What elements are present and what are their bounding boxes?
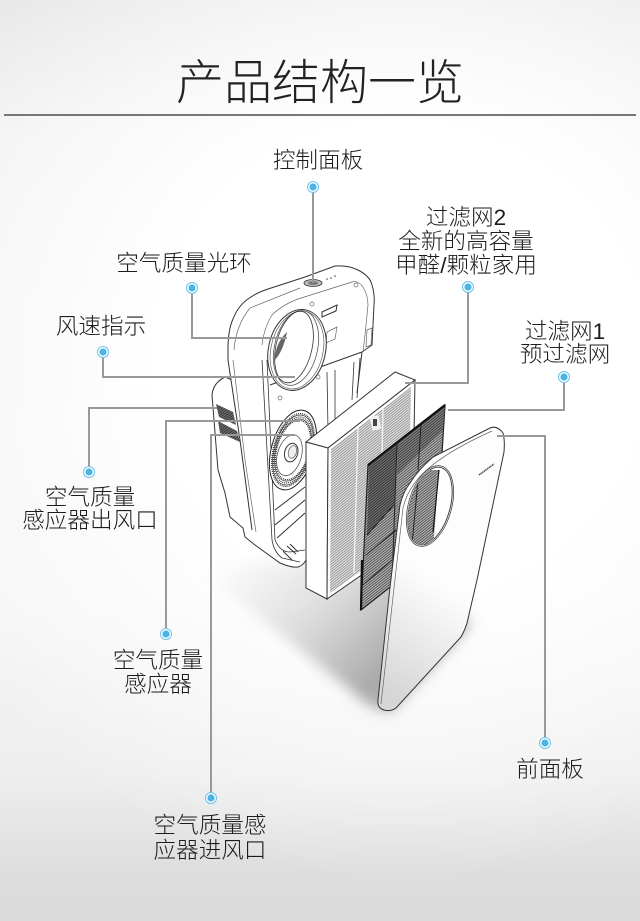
label: filter 2: 甲醛/颗粒家用 <box>395 253 537 278</box>
label: filter 1 <box>520 319 610 367</box>
label: filter 1: 过滤网1 <box>525 319 605 344</box>
connector: sensor outlet <box>84 408 217 478</box>
air quality light ring <box>260 304 334 396</box>
connector: control panel <box>308 182 318 283</box>
label: sensor: 空气质量 <box>113 648 203 673</box>
label: sensor outlet: 感应器出风口 <box>22 508 158 533</box>
label: filter 2: 全新的高容量 <box>398 229 534 254</box>
filter 2 <box>306 372 415 599</box>
label: control panel: 控制面板 <box>273 148 363 173</box>
label: front panel: 前面板 <box>516 757 584 782</box>
front panel <box>378 427 504 711</box>
label: fan speed indicator: 风速指示 <box>56 314 146 339</box>
title underline <box>4 114 636 116</box>
label: sensor inlet: 空气质量感 <box>154 813 266 838</box>
control panel buttons <box>304 275 336 286</box>
label: filter 2: 过滤网2 <box>426 205 506 230</box>
panel shadow <box>195 560 470 712</box>
label: sensor: 感应器 <box>124 672 192 697</box>
connector: filter 2 <box>405 282 474 383</box>
title: 产品结构一览 <box>176 57 464 110</box>
label: sensor outlet <box>22 485 158 533</box>
filter 1 <box>361 405 445 610</box>
label: sensor outlet: 空气质量 <box>45 485 135 510</box>
rear body front frame <box>228 266 374 566</box>
label: air quality light ring: 空气质量光环 <box>116 251 252 276</box>
connector: filter 1 <box>448 372 570 410</box>
label: sensor inlet: 应器进风口 <box>154 838 266 863</box>
connector: light ring <box>186 282 287 338</box>
label: sensor <box>113 648 203 697</box>
rear body side shell <box>212 377 307 567</box>
connector: front panel <box>497 436 550 748</box>
label: filter 2 <box>395 205 537 278</box>
connector: fan speed <box>98 346 295 377</box>
connector: sensor <box>160 421 300 640</box>
air purifier exploded view <box>212 266 504 711</box>
label: sensor inlet <box>154 813 266 863</box>
label: filter 1: 预过滤网 <box>520 342 610 367</box>
connector: sensor inlet <box>206 435 295 804</box>
fan <box>261 405 325 495</box>
brand mark <box>479 464 494 475</box>
